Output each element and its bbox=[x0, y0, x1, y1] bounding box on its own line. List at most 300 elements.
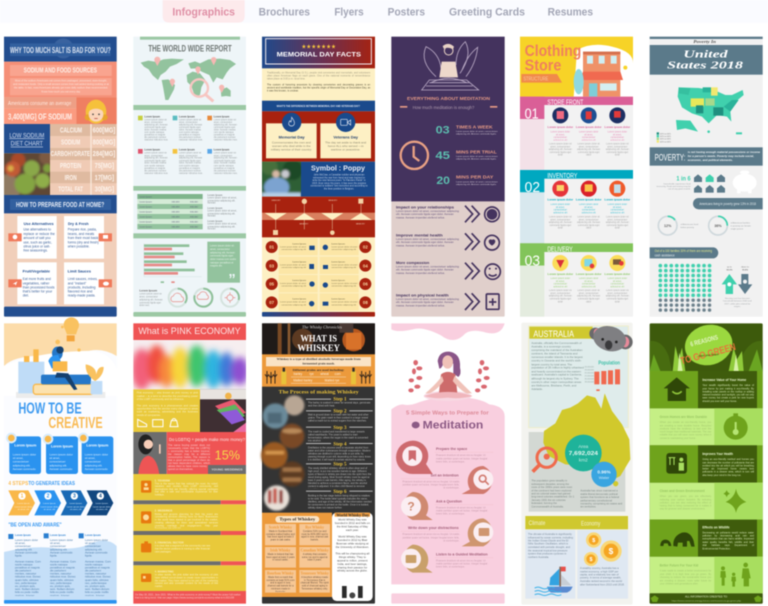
card: australia bbox=[521, 322, 633, 605]
prepare food heading: HOW TO PREPARE FOOD AT HOME? bbox=[16, 200, 105, 209]
photo: pride parade bbox=[200, 389, 246, 432]
step chevrons: Lorem Ipsum bbox=[17, 502, 30, 505]
green footer: https://www.conserve-energy-future.com/reasons-to-go-green.php bbox=[672, 599, 742, 602]
numbered facts: Lorem Ipsum bbox=[292, 261, 306, 263]
donut 12 percent: of Americans lived bbox=[681, 223, 699, 226]
icon: piggy bank bbox=[733, 170, 757, 193]
text columns: Lorem ipsum dolor sit amet, consectetuer adipiscing elit. Aenean commodo ligula. bbox=[15, 539, 38, 557]
impact rows: Impact on your relationships bbox=[396, 205, 455, 210]
impact rows: More compassion bbox=[396, 260, 430, 265]
stat 03: Lorem ipsum dolor sit amet, consectetuer bbox=[456, 130, 498, 133]
report table bbox=[137, 194, 203, 229]
area circle: km2 bbox=[579, 457, 588, 462]
numbered facts: Lorem ipsum dolor sit amet bbox=[280, 245, 306, 248]
icon: gold coins: $ bbox=[592, 538, 596, 544]
numbered facts: Lorem ipsum dolor sit amet bbox=[331, 245, 358, 248]
meditation heading bbox=[406, 410, 489, 431]
section: delivery: Lorem ipsum dolor bbox=[548, 272, 574, 276]
stat 03 bbox=[436, 124, 498, 137]
reason 1 bbox=[650, 371, 763, 408]
sodium table: IRON bbox=[65, 173, 77, 182]
lorem cards: Lorem Ipsum bbox=[14, 444, 36, 448]
reason 6: It was made to create a better environment for your child. It is high time you go green. By choosing to reduce the sustainable home you are creating a cleaner, more safer future for your children and generations after. bbox=[660, 569, 711, 585]
card: pink economy bbox=[129, 323, 250, 605]
low sodium label: LOW SODIUM bbox=[9, 132, 44, 139]
process steps: Step 6 bbox=[333, 490, 347, 495]
lorem block: Lorem Ipsum bbox=[139, 289, 158, 293]
1 in 6 stat: households experience food insecurity. Food and money may be out of any given month. bbox=[656, 183, 691, 190]
numbered text blocks: Lorem ipsum dolor sit amet, consectetur adipiscing elit. Aenean commodo ligula eget dolor. Aenean massa cum sociis natoque penatibus et magnis dis parturient montes nascetur ridiculus mus. bbox=[144, 152, 168, 175]
bar chart bbox=[144, 243, 202, 283]
tip: use alternatives: Use Alternatives bbox=[24, 221, 54, 226]
reason 2 bbox=[650, 408, 763, 445]
tab: Flyers: Flyers bbox=[334, 7, 364, 19]
section: inventory: Lorem ipsum dolor bbox=[576, 198, 602, 202]
whiskey header bbox=[262, 323, 375, 354]
arrows: 18.2% bbox=[726, 270, 732, 272]
numbered facts: Lorem ipsum dolor sit amet bbox=[280, 301, 306, 304]
stat 03: TIMES A WEEK bbox=[456, 124, 494, 129]
section: delivery: Lorem ipsum dolor sit amet, consectetuer adipiscing elit. Aenean commodo ligula eget dolor bbox=[549, 289, 572, 303]
numbered facts: Lorem Ipsum bbox=[292, 243, 306, 245]
step chevrons: Lorem Ipsum bbox=[43, 502, 56, 505]
numbered text blocks: Lorem ipsum dolor sit amet, consectetur adipiscing elit. Aenean commodo ligula eget dolor. Aenean massa cum sociis natoque penatibus et magnis dis parturient montes nascetur ridiculus mus. bbox=[214, 119, 238, 141]
steps heading: 4 STEPS bbox=[8, 481, 29, 487]
quote heading: "BE OPEN AND AWARE" bbox=[8, 523, 62, 529]
poverty title: United bbox=[683, 50, 729, 61]
map legend bbox=[657, 132, 671, 143]
sodium table bbox=[50, 124, 117, 195]
arrows: 15.6% bbox=[742, 270, 748, 272]
sodium and food sources: Most of the sodium Americans eat comes from packaged, processed, store-bought, and restaurant foods. Only a small amount comes from salt added during cooking or at the table. In fact, most Americans already get more daily sodium than recommended. Know how much you eat every day. bbox=[13, 79, 109, 93]
step chevrons: Lorem Ipsum bbox=[69, 502, 82, 505]
icon: wheat and bottles bbox=[265, 368, 372, 384]
types of whiskey: Irish Whisky bbox=[270, 549, 291, 553]
section 2 weddings bbox=[133, 504, 246, 535]
icon: camera bbox=[336, 113, 355, 132]
1 in 6 stat: 1 in 6 bbox=[676, 175, 691, 182]
section: inventory: Lorem ipsum dolor bbox=[548, 198, 574, 202]
population chart bbox=[585, 361, 620, 391]
card: meditation stats bbox=[387, 36, 509, 317]
yellow intro bbox=[133, 389, 200, 432]
numbered text blocks: Lorem Ipsum bbox=[179, 115, 195, 118]
pink footer: On May 18, 2021, June 2021. What is the pink economy or pink money? Must the power full market that is a rising trend. Visit our page: https://www.ceoreg.com/pink-economy-what-is-it-2021/08 bbox=[135, 593, 240, 599]
pill callout bbox=[693, 198, 763, 209]
green footer bbox=[650, 593, 763, 604]
step chevrons: 4 bbox=[99, 494, 102, 500]
text columns: Lorem ipsum dolor sit amet, consectetuer adipiscing elit. Aenean commodo ligula. bbox=[85, 539, 108, 557]
numbered text blocks: Lorem Ipsum bbox=[144, 115, 161, 118]
section: inventory bbox=[520, 170, 633, 243]
step chevrons: Lorem ipsum dolor bbox=[93, 505, 111, 508]
sodium stat: 3,400[MG] OF SODIUM bbox=[8, 111, 72, 121]
population chart: 21,000,000 bbox=[585, 376, 594, 378]
sodium table: CARBOHYDRATE bbox=[51, 149, 90, 158]
numbered facts: Lorem ipsum dolor sit amet bbox=[331, 282, 358, 285]
whiskey header: WHAT IS bbox=[300, 334, 337, 344]
australia intro panel bbox=[529, 326, 628, 428]
section: inventory: Lorem ipsum dolor bbox=[605, 198, 631, 202]
step chevrons: Lorem ipsum dolor bbox=[14, 505, 33, 508]
section: store front: Lorem ipsum dolor bbox=[548, 125, 574, 129]
low sodium label bbox=[4, 124, 50, 153]
area circle bbox=[565, 435, 602, 471]
memorial paragraphs: Traditionally, on Memorial Day (U.S.), people visit cemeteries and memorials, and volunteers often place American flags on each grave. One of the national moments of remembrance takes place at 3:00 p.m. local time. bbox=[267, 71, 370, 80]
tab: Posters: Posters bbox=[388, 7, 425, 19]
creative title: CREATIVE bbox=[48, 415, 103, 432]
salt header: WHY TOO MUCH SALT IS BAD FOR YOU? bbox=[10, 46, 111, 55]
section: store front: Lorem ipsum dolor sit amet, consectetuer adipiscing elit. Aenean commodo ligula eget dolor bbox=[549, 143, 572, 156]
donut 12 percent: below poverty bbox=[681, 226, 695, 229]
poverty title bbox=[650, 45, 763, 75]
card: united states poverty bbox=[645, 36, 767, 317]
numbered facts: Lorem Ipsum bbox=[292, 299, 306, 301]
types of whiskey: Made in Scotland that contains malted barley and has been aged at least 3 years in oak casks. bbox=[266, 530, 295, 541]
sodium and food sources: SODIUM AND FOOD SOURCES bbox=[24, 66, 97, 75]
memorial paragraphs: The custom of honoring ancestors by cleaning cemeteries and decorating graves is an ancient and worldwide tradition, but the specific origin of Memorial Day or Decoration Day, as it was first known, is unclear. bbox=[267, 83, 370, 92]
memorial and veterans panel bbox=[262, 111, 375, 162]
store front icons bbox=[552, 107, 625, 123]
impact rows bbox=[396, 205, 461, 312]
way 2 set an intention bbox=[401, 466, 493, 494]
memorial header bbox=[262, 37, 375, 68]
quote panel: Lorem ipsum dolor sit amet, consectetur adipiscing elit. Aenean commodo ligula eget dolor massa cum sociis natoque penatibus et magnis dis bbox=[210, 244, 236, 267]
section: inventory: 02 bbox=[525, 180, 540, 196]
impact rows: Lorem ipsum dolor sit amet, consectetuer adipiscing elit. Aenean commodo ligula eget dolor. Aenean massa. Aenean imperdiet eleifend tellus. bbox=[396, 210, 459, 219]
arrows: down to bbox=[741, 265, 750, 268]
population chart: 19,000,000 bbox=[585, 382, 594, 384]
sodium table: SODIUM bbox=[61, 137, 80, 146]
world whisky day: World Whisky Day was founded in 2012 and falls on the third Saturday of May each year. bbox=[335, 518, 370, 532]
quote panel bbox=[207, 242, 240, 288]
meditating figure bbox=[422, 42, 479, 90]
meditation subtitle: How much meditation is enough? bbox=[413, 105, 475, 110]
top pink wave bbox=[391, 323, 505, 340]
icon: gold coins bbox=[584, 532, 622, 566]
section 4 marketing: 4. MARKETING bbox=[155, 569, 174, 573]
stat 45: adipiscing elit. Aenean commodo ligula bbox=[456, 158, 497, 161]
step chevrons: sit amet, elit bbox=[96, 508, 108, 511]
section: store front: Lorem ipsum dolor bbox=[605, 125, 631, 129]
tip: limit sauces: Limit sauces, mixes, and "instant" products, including flavored rice and ready-made pasta. bbox=[68, 277, 98, 298]
report table: 000,000 bbox=[190, 226, 199, 228]
report table: 000,000 bbox=[190, 206, 199, 208]
differences band: WHAT'S THE DIFFERENCE BETWEEN MEMORIAL DAY AND VETERANS DAY? bbox=[277, 105, 360, 108]
numbered facts: Lorem ipsum dolor sit amet bbox=[331, 263, 358, 266]
numbered facts: Lorem ipsum dolor sit amet bbox=[280, 263, 306, 266]
way 3 ask a question: Praesent tincidunt sit amet nisi eu feugiat. Ut mattis porttitor quam vel luctus. Integer feugiat lorem felis, ut scelerisque. bbox=[436, 506, 487, 515]
whiskey intro: Malted barley bbox=[293, 379, 313, 383]
report table: Lorem Ipsum bbox=[139, 220, 152, 223]
tip: dry and fresh: Prepare rice, pasta, beans, and meats from their most basic forms (dry and fresh) when possible. bbox=[68, 228, 99, 248]
stat 20 bbox=[436, 175, 498, 187]
whiskey header: The Whisky Chronicles bbox=[302, 325, 342, 330]
pink body bbox=[391, 397, 505, 584]
creative title bbox=[18, 400, 103, 432]
sodium table: CALCIUM bbox=[60, 126, 82, 135]
map legend: 00% to 00% bbox=[660, 135, 671, 138]
sodium stat bbox=[4, 97, 117, 124]
whiskey intro: corn bbox=[335, 372, 341, 376]
memorial and veterans panel: Memorial Day bbox=[279, 136, 305, 140]
reason 5: Effects on Wildlife bbox=[702, 525, 730, 529]
numbered facts: consectetur adipiscing elit bbox=[281, 285, 306, 288]
go green header bbox=[650, 319, 763, 371]
pink economy title: What is PINK ECONOMY bbox=[138, 326, 241, 336]
reason 4 bbox=[650, 483, 763, 520]
numbered facts: consectetur adipiscing elit bbox=[331, 248, 356, 251]
population chart: 22,000,000 bbox=[585, 373, 594, 375]
process steps: The barley is soaked in water for several days, germinate and then dried with heat. bbox=[308, 401, 370, 407]
stat 03: adipiscing elit. Aenean commodo ligula bbox=[456, 133, 497, 136]
process steps: Step 4 bbox=[333, 442, 347, 447]
climate and economy headers: Climate bbox=[529, 521, 546, 527]
reason 4: Clean and Green Environment bbox=[660, 489, 705, 493]
icon: koala bbox=[589, 322, 633, 355]
world whisky day: World Whisky Day was founded in 2012 by Blair Bowman while studying at the University of Aberdeen. bbox=[336, 535, 369, 549]
sodium table: 800[MG] bbox=[93, 137, 116, 146]
section: store front: Lorem ipsum dolor bbox=[576, 125, 602, 129]
numbered facts: Lorem ipsum dolor sit amet bbox=[280, 282, 306, 285]
lgbtiq income panel: The same buying power does not necessarily mean that the LGBTIQ + community has a better income; the reason may be a different consumption habits. The reason is that a good percentage of them do not have dependent children, which allows them to have more money to spend on themselves. bbox=[168, 444, 210, 471]
memorial and veterans panel: Veterans Day bbox=[333, 136, 358, 140]
world whisky day bbox=[332, 513, 373, 601]
economy panel bbox=[577, 530, 628, 599]
card: clothing store bbox=[516, 36, 637, 317]
whiskey intro: Different grains are used including: bbox=[293, 368, 344, 372]
stat 45: Lorem ipsum dolor sit amet, consectetuer bbox=[456, 155, 498, 158]
gray panel bbox=[529, 432, 625, 512]
inventory icons bbox=[552, 181, 625, 197]
numbered facts: 06 bbox=[363, 282, 368, 287]
water circle: 0.96% bbox=[597, 470, 611, 475]
donut 36 percent: 36% bbox=[714, 224, 722, 228]
section: delivery bbox=[520, 243, 633, 317]
section: inventory: Lorem ipsum dolor sit amet, consectetuer adipiscing elit. Aenean commodo ligula eget dolor bbox=[549, 216, 572, 229]
green footer: ALL INFORMATION CREDITED TO: bbox=[685, 595, 728, 599]
quote panel: ” bbox=[228, 272, 236, 288]
leaf sprigs bbox=[408, 360, 490, 392]
donut 36 percent bbox=[709, 216, 752, 235]
icon: gold coins: $ bbox=[609, 546, 614, 556]
pink economy title bbox=[133, 323, 246, 340]
go green header: Start your future bbox=[699, 352, 719, 358]
report table: 000,000 bbox=[172, 206, 180, 208]
report table: Lorem Ipsum bbox=[139, 200, 152, 203]
way 5 guided meditation bbox=[401, 545, 494, 573]
table notes: Lorem Ipsum bbox=[207, 220, 222, 223]
meditation subtitle bbox=[400, 105, 497, 110]
lgbtiq income panel: 15% bbox=[215, 448, 240, 463]
section 1 tourism bbox=[133, 474, 246, 504]
section: store front: STORE FRONT bbox=[547, 97, 584, 106]
reason 6 bbox=[650, 557, 763, 593]
numbered facts: 02 bbox=[363, 245, 368, 250]
reason 5 bbox=[650, 520, 763, 557]
card: what is whiskey bbox=[257, 323, 379, 605]
sodium table: 17[MG] bbox=[95, 173, 114, 182]
reason 6: Better Future For Your Kid bbox=[660, 564, 698, 568]
whiskey intro: barley bbox=[294, 372, 303, 376]
meditation heading: 5 Simple Ways to Prepare for bbox=[406, 410, 489, 416]
numbered facts: consectetur adipiscing elit bbox=[331, 266, 356, 269]
text columns bbox=[8, 533, 111, 596]
section: inventory: INVENTORY bbox=[547, 171, 577, 180]
report table: 000,000 bbox=[172, 216, 180, 218]
creative title: HOW TO BE bbox=[18, 400, 82, 417]
numbered text blocks: Lorem Ipsum bbox=[214, 149, 230, 152]
numbered text blocks: Lorem ipsum dolor sit amet, consectetur adipiscing elit. Aenean commodo ligula eget dolor. Aenean massa cum sociis natoque penatibus et magnis dis parturient montes nascetur ridiculus mus. bbox=[179, 152, 203, 175]
impact rows: Improve mental health bbox=[396, 233, 443, 238]
report title: THE WORLD WIDE REPORT bbox=[148, 44, 232, 54]
process steps: Malt is ground down to a mash with hot water and other grains. The grain mash is then cooked in a large vessel called a mash tun to extract sugars from the starches. bbox=[308, 413, 369, 422]
lorem cards: Lorem Ipsum bbox=[86, 444, 108, 448]
population chart: 24,000,000 bbox=[585, 367, 594, 369]
numbered facts: 05 bbox=[269, 282, 275, 287]
numbered facts: 08 bbox=[363, 300, 368, 305]
impact rows: Impact on physical health bbox=[396, 292, 449, 297]
numbered facts: consectetur adipiscing elit bbox=[281, 303, 306, 306]
icon: clock bbox=[401, 142, 428, 169]
symbol poppy: Symbol : Poppy bbox=[311, 165, 365, 172]
step chevrons: 3 bbox=[73, 494, 76, 500]
lgbtiq income panel: YOUNG WEDDINGS bbox=[211, 469, 243, 472]
section: delivery: Lorem ipsum dolor bbox=[576, 272, 602, 276]
section: store front: Lorem ipsum dolor sit amet, consectetuer adipiscing elit. Aenean commodo ligula eget dolor bbox=[606, 143, 629, 156]
tip: limit sauces: Limit Sauces bbox=[68, 269, 92, 274]
steps heading: TO GENERATE IDEAS bbox=[28, 481, 75, 487]
tip: fruit and vegetable: Fruit/Vegetable bbox=[23, 269, 51, 274]
stat 20: 20 bbox=[436, 175, 450, 187]
memorial header: ★★★★★★★ bbox=[301, 44, 336, 51]
card: memorial day facts bbox=[257, 36, 379, 317]
report table: 000,000 bbox=[190, 201, 199, 203]
area circle: 7,692,024 bbox=[569, 451, 598, 457]
step chevrons: 2 bbox=[47, 494, 50, 500]
water circle: Water bbox=[599, 475, 610, 480]
numbered text blocks bbox=[138, 115, 238, 183]
australia intro panel: AUSTRALIA bbox=[533, 329, 575, 339]
section: store front: Lorem ipsum dolor sit amet, consectetuer adipiscing elit. Aenean commodo ligula eget dolor bbox=[577, 143, 600, 156]
climate and economy headers: Economy bbox=[581, 521, 600, 527]
australia map bbox=[543, 393, 630, 486]
icon: shop building bbox=[574, 52, 627, 97]
lorem block: Lorem ipsum dolor sit amet, consectetur adipiscing elit. Aenean commodo ligula eget dolor sed. bbox=[139, 293, 163, 307]
step chevrons: Lorem Ipsum bbox=[95, 502, 108, 505]
table notes bbox=[207, 194, 241, 229]
section 3 financial sector bbox=[133, 535, 246, 565]
report table: Lorem Ipsum bbox=[139, 225, 152, 228]
report table: 000,000 bbox=[172, 201, 180, 203]
tip: use alternatives bbox=[8, 216, 57, 259]
way 5 guided meditation: Listen to a Guided Meditation bbox=[436, 553, 488, 557]
numbered facts: 04 bbox=[363, 263, 368, 268]
sodium table: 30[MG] bbox=[95, 185, 114, 194]
section 1 tourism: This is the sector that has noticed the most. As noted, travelers and tourists from LGBT community visit destinations that are friendly, offering special packages that offer a safe and comfortable experience for their holidays. bbox=[155, 482, 218, 496]
section 2 weddings: 2. WEDDINGS bbox=[155, 509, 172, 513]
dot grid bbox=[658, 263, 713, 313]
report table: Lorem Ipsum bbox=[139, 210, 152, 213]
yellow intro: Pink economy – also known as pink money or pink market – is a term to describe the purchasing power of the LGBT community and its influence. bbox=[137, 391, 198, 401]
types of whiskey: Canadian Whisky bbox=[301, 549, 329, 553]
memorial paragraphs bbox=[267, 71, 370, 97]
us map bbox=[657, 87, 744, 143]
reason 4: When you use green, you are effectively reducing your carbon footprint. By reducing pollution, you are also reducing the effect of having that is being consumed for it makes it way for greener and cleaner environment. bbox=[660, 495, 711, 510]
report table: 000,000 bbox=[190, 216, 199, 218]
stat 20: adipiscing elit. Aenean commodo ligula bbox=[456, 183, 497, 186]
tab: Greeting Cards: Greeting Cards bbox=[449, 7, 525, 19]
section 3 financial sector: 3. FINANCIAL SECTOR bbox=[155, 540, 184, 544]
world whisky day: This will be championing all things whisky. They to appeal to milion, present India, and beer tastings, sharing their passion for whisky across the globe. bbox=[335, 552, 369, 572]
report table: Lorem Ipsum bbox=[139, 215, 152, 218]
icon: sailboat bbox=[535, 567, 573, 596]
section: inventory: Lorem ipsum dolor sit amet, consectetuer adipiscing elit. Aenean commodo ligula eget dolor bbox=[577, 216, 600, 229]
poverty definition band bbox=[650, 147, 763, 166]
arrows: up to bbox=[727, 265, 733, 268]
stat 20: Lorem ipsum dolor sit amet, consectetuer bbox=[456, 180, 498, 183]
climate and economy headers bbox=[525, 516, 628, 529]
section: store front bbox=[520, 97, 633, 170]
section: delivery: Lorem ipsum dolor bbox=[605, 272, 631, 276]
tip: limit sauces bbox=[64, 262, 112, 304]
tip: use alternatives: Use alternatives to replace or reduce the amount of salt you use, such as garlic, citrus juice or salt-free seasonings. bbox=[23, 228, 55, 252]
poverty definition band: is not having enough material possessions or income for a person's needs. Poverty may include social, economic, and political elements. bbox=[688, 150, 760, 162]
wave background bbox=[4, 541, 117, 604]
lorem block bbox=[139, 289, 166, 307]
poverty title: States 2018 bbox=[667, 61, 743, 72]
salt header bbox=[4, 37, 117, 62]
map pins bbox=[154, 57, 224, 93]
water circle bbox=[591, 462, 617, 487]
1 in 6 stat bbox=[656, 174, 725, 193]
process steps: Step 2 bbox=[333, 409, 347, 414]
poverty in label: Poverty In bbox=[693, 40, 716, 44]
section: delivery: Lorem ipsum dolor sit amet, consectetuer adipiscing elit. Aenean commodo ligula eget dolor bbox=[577, 289, 600, 303]
numbered text blocks: Lorem ipsum dolor sit amet, consectetur adipiscing elit. Aenean commodo ligula eget dolor. Aenean massa cum sociis natoque penatibus et magnis dis parturient montes nascetur ridiculus mus. bbox=[144, 119, 168, 141]
steps heading bbox=[8, 481, 75, 487]
numbered text blocks: Lorem Ipsum bbox=[214, 115, 230, 118]
population chart: 23,000,000 bbox=[585, 370, 594, 372]
sodium table: 284[MG] bbox=[93, 149, 116, 158]
way 2 set an intention: Praesent tincidunt sit amet nisi eu feugiat. Ut mattis porttitor quam vel luctus. Integer feugiat lorem felis, ut scelerisque. bbox=[402, 480, 459, 489]
types of whiskey: Tennessee Whisky bbox=[300, 572, 329, 576]
numbered text blocks: Lorem Ipsum bbox=[144, 149, 161, 152]
australia intro panel: Australia, officially the Commonwealth of Australia, is a sovereign country comprising the mainland of the Australian continent, the island of Tasmania and numerous smaller islands. It is the largest country in Oceania and the world's sixth-largest country by total area. The population of 26 million is highly urbanised and heavily concentrated on the eastern seaboard. Australia's capital is Canberra, although its largest city is Sydney. The country's other major metropolitan areas are Melbourne, Brisbane, Perth, and Adelaide. bbox=[531, 341, 584, 391]
section 1 tourism: 1. TOURISM bbox=[155, 478, 171, 482]
sodium table: 600[MG] bbox=[93, 126, 116, 135]
timeline: MEMORY bbox=[299, 223, 309, 225]
timeline bbox=[262, 197, 375, 237]
numbered text blocks: Lorem ipsum dolor sit amet, consectetur adipiscing elit. Aenean commodo ligula eget dolor. Aenean massa cum sociis natoque penatibus et magnis dis parturient montes nascetur ridiculus mus. bbox=[179, 119, 203, 141]
card: world wide report bbox=[128, 36, 250, 317]
meditation heading: Meditation bbox=[423, 419, 483, 431]
government text: Australia has since maintained a stable liberal democratic political system that functions as a federal parliamentary constitutional monarchy, comprising six states and ten territories. bbox=[580, 489, 622, 508]
step chevrons: 1 bbox=[21, 494, 24, 500]
donut 36 percent: in poverty are female bbox=[731, 225, 752, 228]
numbered facts: Lorem Ipsum bbox=[331, 261, 345, 263]
process steps: The mash is cooled and transferred to large vessels called washbacks. The yeast is added to start fermentation, where the sugar in the mash is converted into alcohol. bbox=[308, 430, 368, 442]
economy panel: A wealthy country, Australia has a market economy, a high GDP per capita, and a relatively low rate of poverty. In terms of average wealth, Australia ranked second in the world after Switzerland from 2013 until 2018. bbox=[580, 567, 624, 586]
whiskey header: WHISKEY bbox=[297, 344, 340, 354]
way 4 write down distractions: Write down your distractions bbox=[408, 526, 459, 530]
stat 20: MINS PER DAY bbox=[456, 175, 493, 180]
card: ways to prepare for meditation bbox=[387, 323, 509, 605]
tip: fruit and vegetable: Eat more fruits and vegetables, rather than processed foods that's better for your diet. bbox=[23, 277, 55, 298]
pill callout: families: cash assistance bbox=[655, 253, 675, 257]
area circle: Area bbox=[578, 444, 589, 449]
way 1 prepare the space: Prepare the space bbox=[436, 447, 467, 451]
